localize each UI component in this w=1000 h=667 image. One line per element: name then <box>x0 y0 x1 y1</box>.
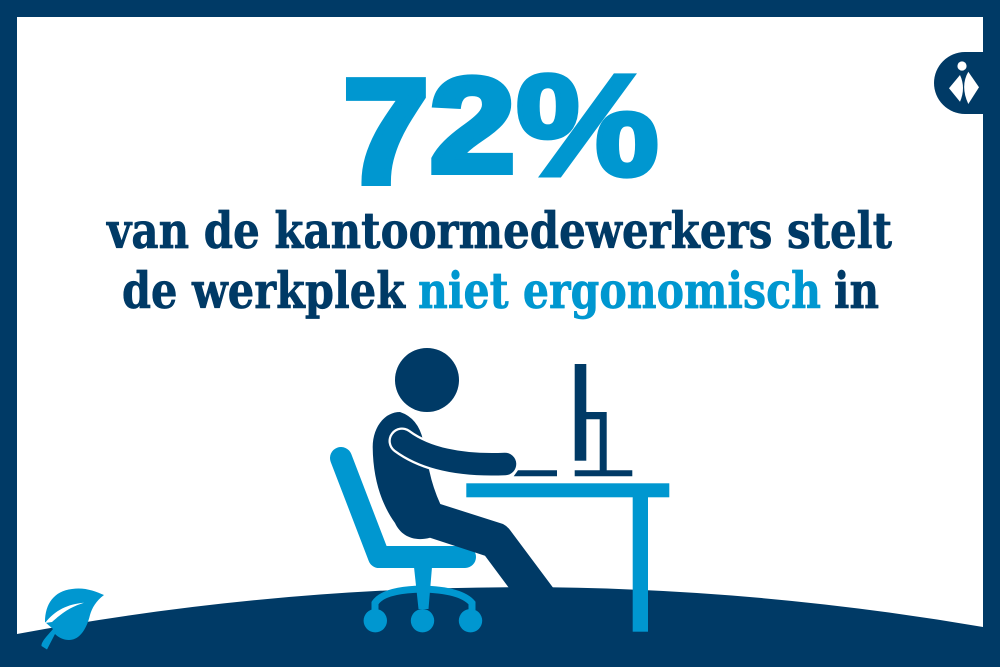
heading text: niet ergonomisch <box>418 261 821 320</box>
big number 72% <box>343 45 659 214</box>
icon: person at desk <box>341 348 669 632</box>
big number 72%: 2 <box>430 52 515 200</box>
icon: leaf <box>41 588 104 650</box>
big number 72%: % <box>516 45 659 206</box>
big number 72%: 7 <box>343 50 429 214</box>
chair <box>341 458 482 632</box>
heading text: de werkplek <box>122 261 406 320</box>
icon: logo badge <box>934 52 983 114</box>
ground hill <box>17 587 983 667</box>
desk <box>466 483 669 632</box>
heading text <box>106 201 892 320</box>
heading text: in <box>834 261 879 320</box>
monitor and keyboard <box>514 364 632 476</box>
person <box>373 348 553 588</box>
